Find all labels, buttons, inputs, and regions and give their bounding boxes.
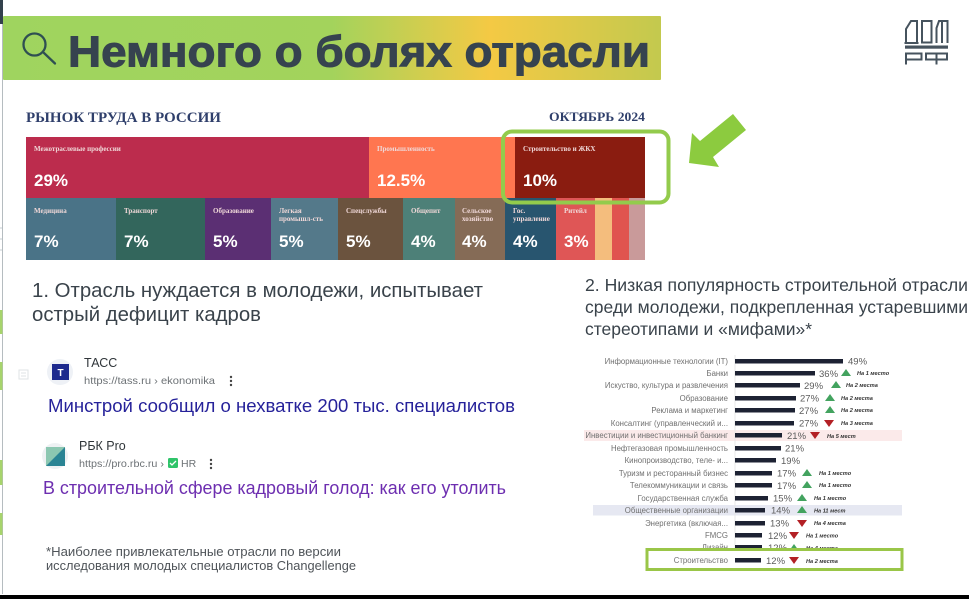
row: investment: 21%	[787, 431, 807, 442]
row: investment: Инвестиции и инвестиционный банкинг	[585, 431, 728, 440]
treemap: labour market by industry	[26, 137, 645, 260]
row: tourism	[619, 468, 852, 480]
row highlight: investment	[584, 430, 902, 441]
title banner	[3, 16, 661, 80]
cell: education: 5%	[213, 232, 238, 251]
heading: date: ОКТЯБРЬ 2024	[549, 109, 646, 124]
text: point 2: 2. Низкая популярность строительной отрасли	[585, 275, 968, 295]
icon: menu dots	[230, 376, 232, 386]
cell: medicine: Медицина	[34, 207, 67, 215]
tag HR: HR	[181, 458, 197, 470]
cell: small pink	[629, 198, 645, 260]
row: design	[702, 543, 838, 554]
row: public organisations: 14%	[771, 506, 791, 516]
cell: light industry: промышл-сть	[279, 215, 323, 223]
footnote: *Наиболее привлекательные отрасли по версии	[46, 545, 341, 559]
cell: public administration	[505, 198, 556, 260]
cell: small red	[612, 198, 629, 260]
cell: catering	[403, 198, 455, 260]
row: public organisations: Общественные организации	[625, 506, 728, 515]
row: arts	[605, 381, 878, 392]
source name: ТАСС	[84, 356, 117, 370]
text: point 2: стереотипами и «мифами»*	[585, 319, 812, 339]
row: FMCG: На 1 место	[806, 534, 839, 540]
cell: catering: Общепит	[411, 207, 441, 215]
cell: catering: 4%	[411, 232, 436, 251]
row: energy: Энергетика (включая...	[645, 519, 728, 528]
row: film	[625, 456, 801, 467]
cell: light industry: Легкая	[279, 207, 302, 215]
row: advertising: Реклама и маркетинг	[651, 406, 728, 415]
cell: industry: Промышленность	[377, 145, 435, 153]
row: banks	[706, 369, 890, 380]
row: construction: 12%	[766, 556, 786, 567]
cell: public administration: 4%	[513, 232, 538, 251]
row: education: На 2 места	[841, 396, 873, 402]
cell: small peach	[595, 198, 612, 260]
cell: special services	[338, 198, 403, 260]
headline: Минстрой сообщил о нехватке 200 тыс. специалистов	[48, 396, 515, 416]
cell: special services: 5%	[346, 232, 371, 251]
icon: menu dots	[210, 459, 212, 469]
row: investment	[585, 431, 856, 442]
title text: Немного о болях отрасли	[68, 28, 650, 76]
row: banks: Банки	[706, 369, 728, 378]
arrow: green pointing to construction	[689, 114, 746, 167]
row: banks: На 1 место	[857, 371, 890, 377]
text: point 1: острый дефицит кадров	[32, 304, 261, 326]
bar chart: attractive industries	[584, 355, 902, 570]
row: construction: Строительство	[674, 556, 729, 565]
source url: https://pro.rbc.ru ›	[79, 458, 165, 470]
row: consulting	[611, 418, 873, 430]
row: design: 12%	[768, 543, 788, 554]
row: civil service	[638, 494, 847, 504]
row: FMCG: 12%	[768, 531, 788, 542]
row: advertising: 27%	[799, 406, 819, 417]
row: consulting: Консалтинг (управленческий и...	[611, 419, 728, 428]
row: banks: 36%	[819, 369, 839, 380]
callout: construction frame	[647, 550, 902, 570]
row: advertising	[651, 406, 873, 417]
row: arts: 29%	[804, 381, 824, 392]
cell: industry: 12.5%	[377, 171, 425, 190]
bottom black strip	[0, 595, 969, 599]
source name: РБК Pro	[79, 439, 126, 453]
search result: TASS	[47, 356, 515, 416]
cell: agriculture: 4%	[462, 232, 487, 251]
row: FMCG	[705, 531, 839, 542]
row: tourism: 17%	[777, 468, 797, 480]
cell: industry	[369, 137, 515, 198]
row: consulting: На 3 места	[841, 421, 873, 427]
row: design: На 4 места	[806, 546, 838, 552]
row: film: Кинопроизводство, теле- и...	[625, 456, 728, 465]
source url: https://tass.ru › ekonomika	[84, 375, 215, 387]
cell: cross-industry professions: 29%	[34, 171, 68, 190]
row: oil and gas	[611, 444, 805, 454]
cell: public administration: управление	[513, 215, 550, 223]
cell: public administration: Гос.	[513, 207, 525, 215]
row: design: Дизайн	[702, 543, 728, 552]
row: telecom: Телекоммуникации и связь	[630, 481, 728, 490]
row: oil and gas: Нефтегазовая промышленность	[611, 444, 728, 453]
row: telecom	[630, 481, 852, 492]
icon: magnifier	[24, 34, 55, 64]
row: public organisations: На 11 мест	[814, 508, 845, 514]
row: education: 27%	[800, 394, 820, 404]
row: civil service: Государственная служба	[638, 494, 729, 503]
row: IT: Информационные технологии (IT)	[605, 357, 728, 366]
row: education: Образование	[680, 394, 728, 403]
cell: cross-industry professions: Межотраслевые профессии	[34, 145, 121, 153]
left edge remnants	[0, 0, 3, 594]
row: energy: На 4 места	[814, 521, 846, 527]
cell: construction and housing	[515, 137, 645, 198]
text: point 2: среди молодежи, подкрепленная устаревшими	[585, 297, 968, 317]
row: education	[680, 394, 873, 404]
cell: transport: Транспорт	[124, 207, 158, 215]
cell: transport	[116, 198, 205, 260]
callout: green frame around construction	[503, 132, 668, 202]
cell: construction and housing: 10%	[523, 171, 557, 190]
cell: agriculture: хозяйство	[462, 215, 494, 223]
cell: cross-industry professions	[26, 137, 369, 198]
cell: medicine	[26, 198, 116, 260]
row: investment: На 5 мест	[827, 434, 856, 440]
heading: labour market: РЫНОК ТРУДА В РОССИИ	[26, 110, 221, 126]
cell: light industry: 5%	[279, 232, 304, 251]
text: point 1: 1. Отрасль нуждается в молодежи, испытывает	[32, 280, 483, 302]
row: film: 19%	[781, 456, 801, 467]
cell: agriculture	[455, 198, 505, 260]
row: public organisations	[625, 506, 845, 516]
cell: retail: Ритейл	[564, 207, 587, 215]
row: telecom: 17%	[777, 481, 797, 492]
cell: special services: Спецслужбы	[346, 207, 387, 215]
row highlight: public organisations	[593, 505, 902, 516]
headline: В строительной сфере кадровый голод: как его утолить	[43, 478, 506, 498]
logo: ДОМ РФ	[904, 21, 948, 64]
footnote: исследования молодых специалистов Changellenge	[46, 559, 356, 573]
row: construction: На 2 места	[806, 559, 838, 565]
cell: retail: 3%	[564, 232, 589, 251]
row: oil and gas: 21%	[785, 444, 805, 454]
icon: TASS	[47, 359, 73, 385]
row: arts: Искуство, культура и развлечения	[605, 381, 728, 390]
row: construction	[674, 556, 838, 567]
icon: RBC	[42, 443, 68, 469]
cell: transport: 7%	[124, 232, 149, 251]
cell: education	[205, 198, 271, 260]
row: arts: На 2 места	[846, 383, 878, 389]
cell: medicine: 7%	[34, 232, 59, 251]
cell: light industry	[271, 198, 338, 260]
row: civil service: На 1 место	[814, 496, 847, 502]
row: consulting: 27%	[799, 418, 819, 430]
icon: small page mark	[19, 370, 28, 379]
row: tourism: Туризм и ресторанный бизнес	[619, 469, 728, 478]
row: civil service: 15%	[773, 494, 793, 504]
row: energy: 13%	[770, 518, 790, 530]
cell: education: Образование	[213, 207, 254, 215]
icon: TASS: T	[57, 368, 64, 379]
row: IT: 49%	[848, 356, 868, 368]
row: tourism: На 1 место	[819, 471, 852, 477]
row: telecom: На 1 место	[819, 483, 852, 489]
row: energy	[645, 518, 846, 530]
row: FMCG: FMCG	[705, 531, 728, 540]
search result: RBC Pro	[42, 439, 506, 498]
cell: agriculture: Сельское	[462, 207, 492, 215]
cell: construction and housing: Строительство и ЖКХ	[523, 145, 595, 153]
icon: green check	[168, 458, 178, 468]
row: advertising: На 2 места	[841, 408, 873, 414]
cell: retail	[556, 198, 595, 260]
row: IT	[605, 356, 868, 368]
